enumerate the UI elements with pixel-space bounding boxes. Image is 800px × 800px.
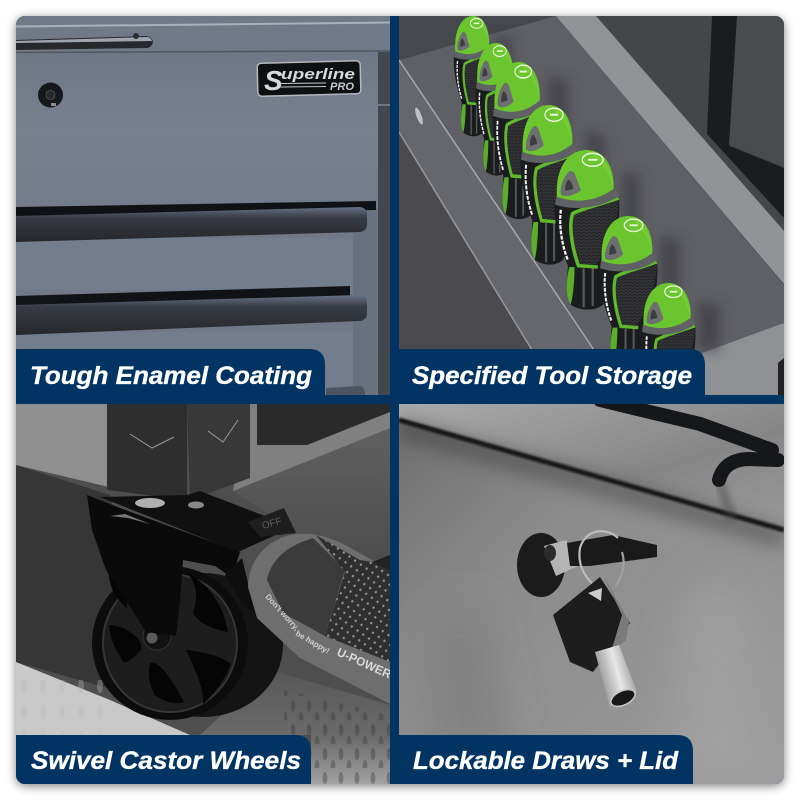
drawer handle 1 (16, 207, 367, 242)
screwdriver 3 (493, 62, 545, 219)
drawer handle 3 (326, 386, 365, 395)
panel: swivel castor wheels (16, 404, 394, 784)
door panel (16, 53, 46, 54)
label: lockable draws and lid (399, 735, 693, 784)
screwdriver 4 (521, 105, 578, 265)
wheel hub (143, 622, 171, 650)
label: lockable draws and lid: Lockable Draws + Lid (413, 747, 679, 775)
lower floor (200, 670, 390, 784)
leg post (107, 404, 250, 500)
door lock (38, 82, 63, 108)
label: specified tool storage (399, 349, 705, 395)
wheel spoke holes (109, 570, 231, 704)
panel: tough enamel coating (16, 16, 390, 395)
shoe: U-POWER (335, 645, 394, 681)
background beyond tray (707, 16, 784, 218)
drawer handle 2 (16, 295, 367, 335)
shoe (248, 534, 394, 704)
key blade (595, 645, 638, 710)
cabinet strip (233, 404, 390, 491)
tray floor (400, 16, 784, 358)
tyre (123, 573, 283, 717)
gap shadow (16, 286, 350, 306)
key in lock (567, 535, 657, 566)
fork (87, 495, 255, 636)
right side frame (378, 52, 390, 395)
light floor (16, 662, 190, 735)
lock barrel (517, 533, 578, 597)
drawer face 2 (16, 332, 353, 395)
brake pedal (248, 508, 296, 537)
wheel rim (92, 566, 248, 720)
screwdriver 7 (642, 283, 696, 350)
badge: Superline Pro: PRO (330, 81, 354, 93)
panel: specified tool storage (399, 16, 784, 425)
badge: Superline Pro: uperline (281, 66, 355, 83)
label: specified tool storage: Specified Tool Storage (412, 362, 692, 390)
cabinet box (257, 404, 390, 445)
floor tread (284, 690, 390, 784)
label: tough enamel coating: Tough Enamel Coating (30, 362, 312, 390)
tray front wall (399, 60, 594, 350)
tray rail (556, 16, 784, 284)
brake pedal: OFF (261, 516, 283, 532)
badge: Superline Pro: S (264, 65, 283, 96)
label: swivel castor wheels (16, 735, 311, 784)
key ring (579, 531, 624, 588)
panel: lockable draws and lid (399, 400, 784, 784)
drawer face 1 (16, 238, 353, 290)
bracket top plate (100, 491, 293, 552)
tool shadows (495, 35, 720, 350)
drawer shadow (16, 201, 376, 216)
shoe: be happy! (294, 629, 331, 656)
badge: Superline Pro (257, 61, 361, 96)
screwdriver 5 (554, 150, 620, 310)
hanging key (553, 577, 630, 672)
lid edge shadow (399, 420, 784, 538)
label: tough enamel coating (16, 349, 325, 395)
screwdriver 2 (476, 43, 512, 176)
carpet (399, 133, 532, 350)
wall shading (430, 590, 760, 780)
lid handle (16, 33, 153, 50)
lid handle (600, 400, 778, 520)
shoe sole text: Don't worry, (264, 592, 301, 632)
tray corner (702, 323, 784, 395)
label: swivel castor wheels: Swivel Castor Wheels (31, 747, 301, 775)
mounting bolts (135, 498, 204, 508)
screwdriver 1 (454, 16, 493, 136)
screwdriver 6 (600, 216, 658, 349)
back mat (234, 428, 390, 496)
lid surface (399, 404, 784, 528)
cabinet side (16, 404, 113, 488)
top lid band (16, 16, 390, 53)
dark floor mat (16, 465, 113, 688)
drawer frame (353, 207, 377, 395)
